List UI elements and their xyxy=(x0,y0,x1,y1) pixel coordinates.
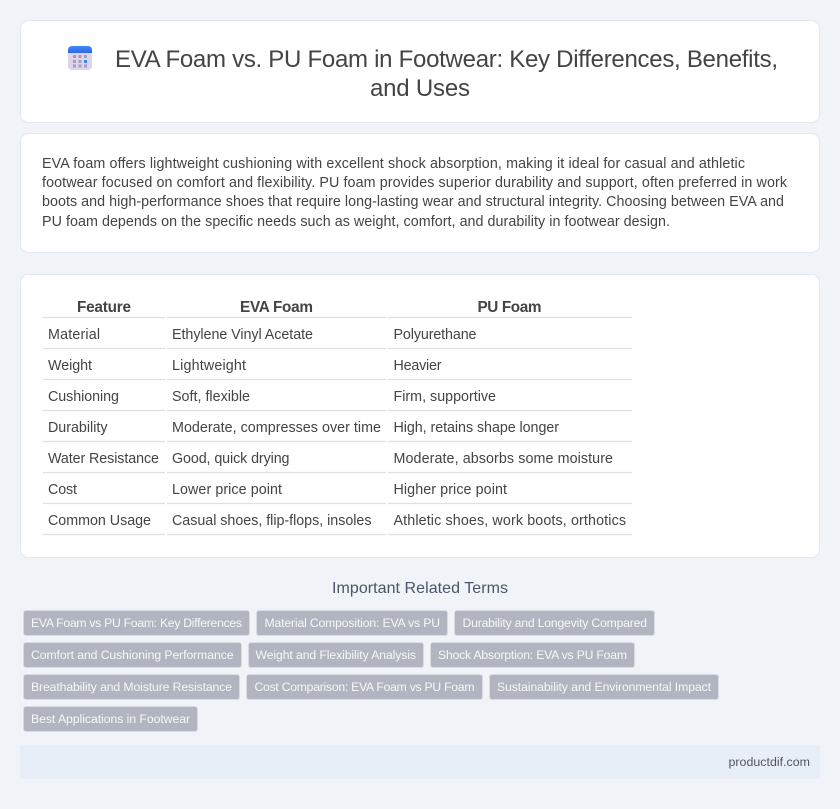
intro paragraph: footwear focused on comfort and flexibility. PU foam provides superior durability and support, often preferred in work xyxy=(42,175,788,191)
row: cost: Cost xyxy=(48,482,77,498)
footer: productdif.com xyxy=(728,755,810,769)
tag: Sustainability and Environmental Impact xyxy=(497,680,712,694)
row: cushioning: Cushioning xyxy=(48,389,119,405)
related term tags xyxy=(24,610,718,732)
tag: Durability and Longevity Compared xyxy=(462,616,647,630)
row: water resistance: Water Resistance xyxy=(48,451,159,467)
tag xyxy=(24,674,240,700)
row: durability: Moderate, compresses over time xyxy=(172,420,381,436)
tag xyxy=(248,642,424,668)
tag: Comfort and Cushioning Performance xyxy=(31,648,234,662)
title xyxy=(115,46,778,102)
row: material: Material xyxy=(48,327,100,343)
row: common usage: Common Usage xyxy=(48,513,151,529)
tag xyxy=(24,706,198,732)
tag: Material Composition: EVA vs PU xyxy=(264,616,440,630)
table header row: Feature xyxy=(77,299,131,316)
tag xyxy=(256,610,448,636)
panel: comparison table xyxy=(20,274,820,558)
row: material xyxy=(48,327,477,343)
row: common usage xyxy=(48,513,626,529)
tag: Shock Absorption: EVA vs PU Foam xyxy=(438,648,627,662)
row: durability: High, retains shape longer xyxy=(394,420,559,436)
row: cushioning: Soft, flexible xyxy=(172,389,250,405)
tag xyxy=(24,610,250,636)
panel: header xyxy=(20,20,820,122)
table header row xyxy=(77,299,542,316)
row: durability xyxy=(48,420,559,436)
tag: Weight and Flexibility Analysis xyxy=(256,648,416,662)
row: common usage: Athletic shoes, work boots, orthotics xyxy=(394,513,626,529)
tag xyxy=(24,642,242,668)
row: common usage: Casual shoes, flip-flops, insoles xyxy=(172,513,372,529)
intro paragraph: boots and high-performance shoes that require long-lasting wear and structural integrity. Choosing between EVA and xyxy=(42,194,784,210)
tag: EVA Foam vs PU Foam: Key Differences xyxy=(31,616,242,630)
tag: Cost Comparison: EVA Foam vs PU Foam xyxy=(254,680,474,694)
tag: Best Applications in Footwear xyxy=(31,712,190,726)
row: cost xyxy=(48,482,507,498)
footer xyxy=(20,745,820,779)
row: durability: Durability xyxy=(48,420,108,436)
table header row: PU Foam xyxy=(478,299,542,316)
row: weight: Weight xyxy=(48,358,92,374)
title: EVA Foam vs. PU Foam in Footwear: Key Differences, Benefits, xyxy=(115,46,778,73)
row: weight: Lightweight xyxy=(172,358,246,374)
intro paragraph xyxy=(42,156,788,230)
tag xyxy=(490,674,718,700)
row: cost: Higher price point xyxy=(394,482,507,498)
title: and Uses xyxy=(370,75,470,102)
heading: important related terms: Important Related Terms xyxy=(332,580,508,597)
row: material: Ethylene Vinyl Acetate xyxy=(172,327,313,343)
row: water resistance: Moderate, absorbs some moisture xyxy=(394,451,613,467)
panel: intro text xyxy=(20,134,820,252)
intro paragraph: PU foam depends on the specific needs such as weight, comfort, and durability in footwear design. xyxy=(42,214,670,230)
intro paragraph: EVA foam offers lightweight cushioning with excellent shock absorption, making it ideal for casual and athletic xyxy=(42,156,745,172)
row: material: Polyurethane xyxy=(394,327,477,343)
tag xyxy=(430,642,634,668)
row: cost: Lower price point xyxy=(172,482,282,498)
row: water resistance: Good, quick drying xyxy=(172,451,290,467)
tag xyxy=(454,610,654,636)
row: weight xyxy=(48,358,442,374)
tag: Breathability and Moisture Resistance xyxy=(31,680,232,694)
row: water resistance xyxy=(48,451,613,467)
table header row: EVA Foam xyxy=(240,299,313,316)
icon: calendar xyxy=(68,46,92,70)
row: cushioning: Firm, supportive xyxy=(394,389,496,405)
row: cushioning xyxy=(48,389,496,405)
tag xyxy=(246,674,482,700)
row: weight: Heavier xyxy=(394,358,442,374)
